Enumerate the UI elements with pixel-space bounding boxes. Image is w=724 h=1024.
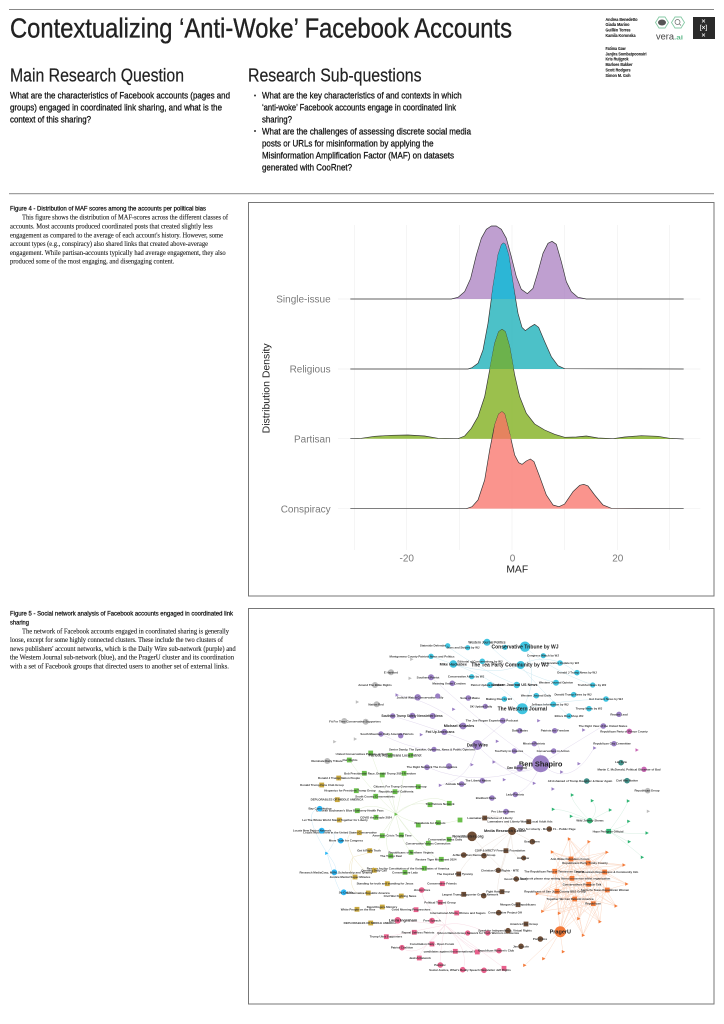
cluster: green groups: COVID the People 2024 (360, 815, 392, 819)
cluster: green groups: Conservative Lady (392, 870, 418, 874)
cluster: bright blue nodes: Research MediaCorp, MSM, Scholarship and Tyranny (299, 870, 373, 874)
cluster: Daily Wire (purple): Senior Dandy, The Speaker, Opinions, News & Public Opinions (389, 747, 475, 751)
cluster: green groups (316, 751, 462, 875)
cluster: Daily Wire (purple): Meaning Under Condem (432, 681, 466, 685)
cluster: Western Journal (blue): Ethics Rise Shop WJ (555, 714, 584, 718)
cluster: gray unaffiliated nodes (311, 658, 660, 813)
figure 4 caption: produced some of the most engaging, and disengaging content. (10, 257, 174, 266)
text block: research sub-questions: What are the key characteristics of and contexts in which (262, 91, 462, 102)
y-axis title: Distribution Density (262, 343, 273, 433)
cluster: Daily Wire (purple): Dan Bongino (507, 766, 527, 770)
cluster: PragerU (orange): Facebook please stop writing liberal nonsense leftist organization (520, 876, 611, 880)
cluster: bright blue nodes: So Call Me (339, 890, 354, 894)
author list: Scott Rodgers (606, 68, 631, 73)
cluster: Daily Wire (purple): Michael Knowles (444, 724, 474, 728)
cluster: Daily Wire (purple): Lady Patriots (506, 792, 525, 796)
text block: research sub-questions: posts or URLs for misinformation by applying the (262, 138, 434, 150)
cluster: pink groups: Jewish Network (409, 956, 431, 960)
cluster: Daily Wire (purple): Daily Wire (467, 743, 488, 748)
cluster: Western Journal (blue): Donald Trump News by WJ (554, 693, 592, 697)
cluster: gold groups (300, 776, 417, 925)
text block: main research question (10, 91, 230, 126)
top rule (9, 9, 714, 10)
cluster: pink groups: QAnon Nation Group Network for Truth Warriors in America (437, 931, 519, 935)
cluster: news publishers (brown): Conservative Project Off (488, 911, 522, 915)
text block: research sub-questions: sharing? (262, 114, 292, 126)
figure 4 caption: Figure 4 - Distribution of MAF scores among the accounts per political bias (10, 206, 207, 213)
cluster: Daily Wire (purple): The Joe Rogan Experience Podcast (466, 719, 518, 723)
figure 5 caption: Figure 5 - Social network analysis of Facebook accounts engaged in coordinated link (10, 611, 234, 618)
cluster: green groups: Our Rights (343, 758, 358, 762)
cluster: news publishers (brown): Lawmakers and Liberty Watch, Local Adult Ads (488, 820, 553, 824)
cluster: Western Journal (blue): Conservative Alerts by WJ (448, 675, 485, 679)
cluster: Western Journal (blue): Patriot Update Breitbart (471, 683, 503, 687)
cluster: Daily Wire (purple): The Right Network The Conservative (407, 765, 458, 769)
cluster: news publishers (brown): Largest Trump Supporter Group Network (442, 892, 499, 896)
cluster: Daily Wire (purple): Sons of Maine (460, 696, 480, 700)
cluster: Daily Wire (purple): Mission Patriots (523, 742, 546, 746)
x-axis tick labels: 20 (612, 554, 624, 565)
cluster: Daily Wire (purple): Judicial Watch Conservative Daily (397, 695, 444, 699)
ridge: conspiracy (350, 412, 684, 509)
cluster: news publishers (brown): Media Research Center (484, 829, 527, 833)
cluster: gold groups: White People on the Rise (341, 907, 376, 911)
heading: research sub-questions: Research Sub-questions (248, 66, 422, 86)
cluster: green groups: Citizens For Trump Government group (374, 785, 427, 789)
cluster: green coordinated groups: Wild Johnny Shows (576, 819, 604, 823)
cluster: news publishers (brown): Fight Hate Group (486, 890, 510, 894)
cluster: Western Journal (blue): Hot Current News by WJ (589, 697, 623, 701)
cluster: news publishers (brown) (437, 816, 576, 949)
cluster: pink groups: Good Morning Progressives (392, 908, 431, 912)
network edges (311, 642, 647, 970)
cluster: gray unaffiliated nodes: Nation Red (368, 702, 384, 706)
author list (606, 17, 646, 78)
cluster: news publishers (brown): Speak for Independence, Virtual Rights (478, 929, 532, 933)
cluster: green groups: United Conservatives Patriots of Truth (336, 752, 389, 756)
cluster: PragerU (orange): Santa Fe Texas Republican Women (581, 888, 629, 892)
cluster: gold groups: The Conservative Republic America (340, 891, 390, 895)
cluster: gold groups: Locals Music Show in the United States Conservative (303, 831, 377, 835)
cluster: bright blue nodes (293, 806, 373, 895)
cluster: Daily Wire (purple): SK Update Daily (470, 704, 493, 708)
cluster: Daily Wire (purple): Conservatives in Action (537, 749, 570, 753)
cluster: gold groups: Opening Daily Call (361, 868, 387, 872)
cluster: PragerU (orange): PragerU (550, 930, 571, 936)
cluster: green groups: American Crisis Trump Time (372, 834, 412, 838)
cluster: green groups: Presidents for Patriots (414, 821, 446, 825)
cluster: PragerU (orange): Together We Can Rebuild America (546, 897, 594, 901)
cluster: Daily Wire (purple): Southern Trump Safety Newsletter News (381, 714, 443, 718)
cluster: bright blue nodes: Move Truth for Congress (329, 839, 363, 843)
cluster: Daily Wire (purple): Breitbart News (476, 796, 497, 800)
cluster: news publishers (brown): COIP & MRCTV Freedom Foundation (475, 849, 525, 853)
cluster: gold groups: Civil War Fighting News (384, 894, 417, 898)
cluster: green groups: Republicans of Northern Virginia (388, 850, 434, 854)
cluster: gold groups: Standing for truth and standing for Jesus (357, 882, 414, 886)
cluster: pink groups: Constitution Daily - Open Forum (410, 942, 455, 946)
cluster: Daily Wire (purple): Southern Patriot (417, 675, 439, 679)
panel: social network graph (248, 608, 714, 1004)
figure 4 caption (10, 206, 228, 266)
cluster: news publishers (brown): Jim Lincoln (513, 944, 529, 948)
figure 4 caption: This figure shows the distribution of MAF-scores across the different classes of (22, 213, 228, 222)
cluster: PragerU (orange): Republican (585, 902, 601, 906)
cluster: Western Journal (blue): Truthful News by WJ (578, 683, 607, 687)
cluster: pink groups (370, 881, 519, 973)
cluster: green groups: Hispanics for President Trump Group (324, 789, 376, 793)
cluster: green groups: Patriotic Republicans Local Patriot (369, 753, 422, 757)
figure 5 caption: with a set of Facebook groups that directed users to another set of external links. (10, 662, 229, 670)
cluster: pink groups: Patriotic (434, 963, 446, 967)
cluster: Western Journal (blue): Donald J Trump News by WJ (557, 671, 597, 675)
cluster: pink groups: Conservative Friends (427, 882, 457, 886)
cluster: news publishers (brown): Lawmakers in Defense of Liberty (467, 816, 513, 820)
y-axis category labels: Religious (290, 365, 331, 376)
cluster: pink groups: Laura Ingraham (389, 918, 418, 922)
cluster: green groups: Deborah Buchanan's Blue Blueberry Health Pass (316, 809, 384, 813)
cluster: gold groups: DEPLORABLES OF MIDDLE AMERICA (344, 921, 397, 925)
icon: vera.ai logo: vera (656, 32, 675, 42)
cluster: Western Journal (blue): Stars and Stripes by WJ (446, 646, 480, 650)
title: Contextualizing ‘Anti-Woke’ Facebook Accounts (10, 13, 512, 44)
y-axis category labels (276, 295, 331, 516)
icon: vera.ai logo: .ai (674, 36, 683, 42)
figure 4 caption: accounts. Most accounts produced coordinated posts that created slightly less (10, 221, 213, 230)
cluster: gray unaffiliated nodes: Ruminate Daily Tribute (311, 759, 343, 763)
text block: research sub-questions: What are the challenges of assessing discrete social media (262, 126, 472, 138)
cluster: news publishers (brown): Christian Civil Rights - MTE (481, 868, 519, 872)
icon: vera.ai logo (656, 17, 684, 42)
x-axis tick labels: -20 (400, 554, 414, 565)
cluster: pink groups: Political Topped Group (424, 900, 456, 904)
cluster: small magenta nodes: Martin C. McDonald, Political Observer of Bad (598, 767, 661, 771)
figure 5 caption: the Western Journal sub-network (blue), and the PragerU cluster and its coordination (10, 653, 234, 662)
cluster: green groups: Restore Tiger Movement 2024 (416, 857, 457, 861)
cluster: green groups: Bob Presidential Race, Donald Trump 2024 Freedom (344, 772, 416, 776)
cluster: gold groups: Get It Right Truth (357, 849, 381, 853)
cluster: Daily Wire (purple): Ben Shapiro (519, 759, 563, 768)
cluster: Western Journal (blue): Western Journal US News (491, 683, 537, 687)
text block: main research question: What are the characteristics of Facebook accounts (pages and (10, 91, 230, 102)
cluster: Western Journal (blue): Stateside Defender (420, 644, 447, 648)
cluster: Daily Wire (purple): Fed Up Americans (426, 730, 455, 734)
cluster: Western Journal (blue): Western Journal Politics (468, 640, 506, 644)
ridge: single-issue (350, 226, 684, 299)
cluster: PragerU (orange): Anti-Woke Defenders Forum (551, 857, 590, 861)
cluster: Western Journal (blue): Western Journal Daily (521, 694, 552, 698)
panel: ridgeline chart of MAF distribution (248, 202, 714, 596)
ridge: religious (350, 243, 684, 369)
y-axis category labels: Conspiracy (281, 505, 331, 516)
cluster: PragerU (orange): Republicans Party Trinity County (562, 861, 608, 865)
cluster: PragerU (orange): Republicans of San Juan County BBS Group (524, 889, 586, 893)
cluster: Western Journal (blue): Montgomery County Patriots News and Politics (389, 654, 455, 658)
cluster: Western Journal (blue): Conservative Update by WJ (541, 661, 579, 665)
cluster: bright blue nodes: Bay Constitution (308, 807, 332, 811)
author list: Marloes Bakker (606, 62, 633, 67)
cluster: Daily Wire (purple): Pro Liberty News (491, 810, 515, 814)
cluster: PragerU (orange) (520, 837, 638, 967)
cluster: green groups: Conservative News Daily (428, 837, 462, 841)
cluster: news publishers (brown): Ask Now (517, 856, 530, 860)
figure 5 caption: sharing (10, 620, 29, 626)
icon: university logo (693, 17, 715, 39)
cluster: news publishers (brown): Pistol Box (533, 937, 547, 941)
cluster: Western Journal (blue): Making Rise by WJ (486, 697, 512, 701)
cluster: green groups: Readers for the Constitution of the United States of America (367, 866, 450, 870)
author list: Simon M. Goh (606, 73, 631, 78)
cluster: Western Journal (blue): The Western Journal (498, 706, 548, 712)
cluster: PragerU (orange): Conservatives Pinnacle Talk (563, 882, 602, 886)
cluster: news publishers (brown): America First Group (510, 922, 538, 926)
cluster: Western Journal (blue): Trump News by WJ (576, 707, 603, 711)
figure 5 caption (10, 611, 236, 670)
figure 5 caption: The network of Facebook accounts engaged in coordinated sharing is generally (22, 626, 229, 635)
x-axis tick labels (400, 554, 624, 565)
cluster: pink groups: Patriot Coalition (391, 946, 413, 950)
cluster: small magenta nodes: Republican Party of Prince County (600, 729, 648, 733)
text block: research sub-questions: Misinformation Amplification Factor (MAF) on datasets (262, 150, 454, 162)
cluster: green groups: Republicans of California (379, 790, 414, 794)
cluster: news publishers (brown): Jefferson Ken Democrat Group (453, 853, 496, 857)
author list: Kamila Koronska (606, 33, 636, 38)
cluster: Daily Wire (purple): The Right View of the United States (579, 724, 628, 728)
cluster: gray unaffiliated nodes: Amend The Bible Rights (358, 683, 392, 687)
author list: Fatima Gaw (606, 46, 626, 51)
cluster: Daily Wire (purple): Tea Party in America (495, 749, 524, 753)
cluster: green groups: The Trump Deal (380, 854, 402, 858)
cluster: pink groups: Jimmy Dore (414, 888, 431, 892)
cluster: Daily Wire (purple): Ambalu Marcer (446, 782, 467, 786)
cluster: pink groups: Repeal Selfless Patriots (402, 930, 435, 934)
cluster: green groups: South County Conservatives (355, 794, 395, 798)
cluster: green coordinated groups (552, 793, 649, 859)
cluster: gray unaffiliated nodes: Fit For Time Conservative Supporters (329, 719, 381, 723)
cluster: Western Journal (blue): The Tea Party Community by WJ (471, 663, 549, 669)
author list: Andrea Benedetto (606, 17, 638, 22)
figure 5 caption: loose, except for some highly connected clusters. These include the two clusters of (10, 635, 223, 644)
cluster: news publishers (brown): The Inspired Post Tyranny (437, 872, 473, 876)
cluster: gold groups: Let The Whole World Stand Together for Liberty (302, 818, 368, 822)
cluster: Western Journal (blue) (389, 639, 623, 719)
cluster: Western Journal (blue): Conservative Tribune by WJ (492, 644, 559, 650)
cluster: PragerU (orange): The Mountain Republicans & Community Info (576, 870, 638, 874)
cluster: gray unaffiliated nodes: E Hartford (384, 670, 398, 674)
cluster: gold groups: Donald J Trump Nation People (318, 776, 360, 780)
text block: research sub-questions: generated with CooRnet? (262, 162, 352, 174)
cluster: Western Journal (blue): Western Journal Opinion (539, 681, 573, 685)
cluster: gold groups: Donald Trump Fans Club Group (300, 783, 344, 787)
cluster: green groups: The Patriots Network (426, 802, 455, 806)
text block: research sub-questions: ‘anti-woke’ Facebook accounts engage in coordinated link (262, 103, 456, 114)
heading: main research question: Main Research Question (10, 66, 184, 86)
cluster: news publishers (brown): Morgan Gold Republicans (500, 903, 536, 907)
figure 4 caption: account types (e.g., conspiracy) also shared links that created above-average (10, 239, 208, 248)
figure 4 caption: engagement. While partisan-accounts typically had average engagement, they also (10, 248, 226, 257)
cluster: gray unaffiliated nodes: Republican Group (634, 789, 660, 793)
cluster: teal nodes: All Ashamed of Trump Daughter & Never Again (548, 779, 612, 783)
cluster: pink groups: International Affairs, Rhinos and Sugars (430, 911, 486, 915)
cluster: pink groups: Free Speech (423, 919, 441, 923)
cluster: teal nodes: Lab Kyle (615, 760, 627, 764)
cluster: gold groups: DEPLORABLES OF MIDDLE AMERICA (311, 798, 364, 802)
x-axis tick labels: 0 (510, 554, 516, 565)
figure 4 caption: engagement as compared to the average of each account's history. However, some (10, 230, 223, 239)
x-axis title: MAF (506, 565, 528, 576)
y-axis category labels: Single-issue (276, 295, 331, 306)
cluster: PragerU (orange): The Republican Party of Tennessee County (524, 869, 584, 873)
cluster: news publishers (brown): Good Old Liberty (504, 877, 528, 881)
cluster: Daily Wire (purple): South Mountain Daily America Patriots (360, 732, 414, 736)
author list: Giada Marino (606, 22, 630, 27)
cluster: small magenta nodes (598, 729, 661, 772)
author list: Guillén Torres (606, 27, 631, 32)
ridge: partisan (350, 329, 684, 439)
cluster: news publishers (brown): NewsBusters.org (452, 834, 484, 838)
cluster: Western Journal (blue): Editorial of Conservatives by WJ (458, 659, 503, 663)
cluster: Daily Wire (purple): Patriots for Freedom (541, 729, 570, 733)
cluster: Western Journal (blue): Congress Watch by WJ (527, 654, 559, 658)
middle rule (9, 193, 714, 194)
figure 5 caption: news publishers' account networks, which is the Daily Wire sub-network (purple) and (10, 644, 236, 653)
cluster: gold groups: David Rogers Ministry (367, 905, 398, 909)
cluster: pink groups: Trump Ultra Supporters (370, 935, 403, 939)
cluster: Daily Wire (purple): Reader Lead (610, 712, 628, 716)
cluster: Western Journal (blue): Jeffreys Information by WJ (531, 702, 569, 706)
cluster: news publishers (brown): Mary for Liberty - Moore, FL - Public Page (518, 827, 576, 831)
cluster: Daily Wire (purple): The Liberty Nation (465, 779, 491, 783)
cluster: bright blue nodes: Locate New Patriot Network (293, 829, 332, 833)
cluster: pink groups: candidates against the international Marx (424, 949, 481, 953)
cluster: Western Journal (blue): Mike Huckabee (440, 662, 467, 666)
cluster: Daily Wire (purple) (360, 674, 631, 815)
cluster: green coordinated groups: Hope Pedigree Official (593, 829, 624, 833)
cluster: teal nodes: Civil War Nation (616, 779, 638, 783)
cluster: teal nodes (548, 760, 638, 784)
y-axis category labels: Partisan (294, 435, 331, 446)
cluster: gold groups: Justice Mental Super Minutes (330, 875, 371, 879)
cluster: news publishers (brown): Brad Owen (524, 840, 540, 844)
text block: main research question: groups) engaged in coordinated link sharing, and what is the (10, 103, 222, 114)
text block: research sub-questions (254, 91, 472, 174)
author list: Kris Ruijgrok (606, 57, 629, 62)
author list: Janjira Sombatpoonsiri (606, 51, 646, 56)
cluster: green groups: Conservative Values Connection (406, 841, 451, 845)
cluster: pink groups: Social Justice, What's Really Speech Newsletter Jeff Rights (429, 968, 511, 972)
text block: main research question: context of this sharing? (10, 114, 91, 126)
cluster: pink groups: Republican Women's Club (478, 949, 514, 953)
cluster: Daily Wire (purple): Republican City Committee (593, 742, 631, 746)
cluster: Daily Wire (purple): Daily Mates (512, 729, 528, 733)
